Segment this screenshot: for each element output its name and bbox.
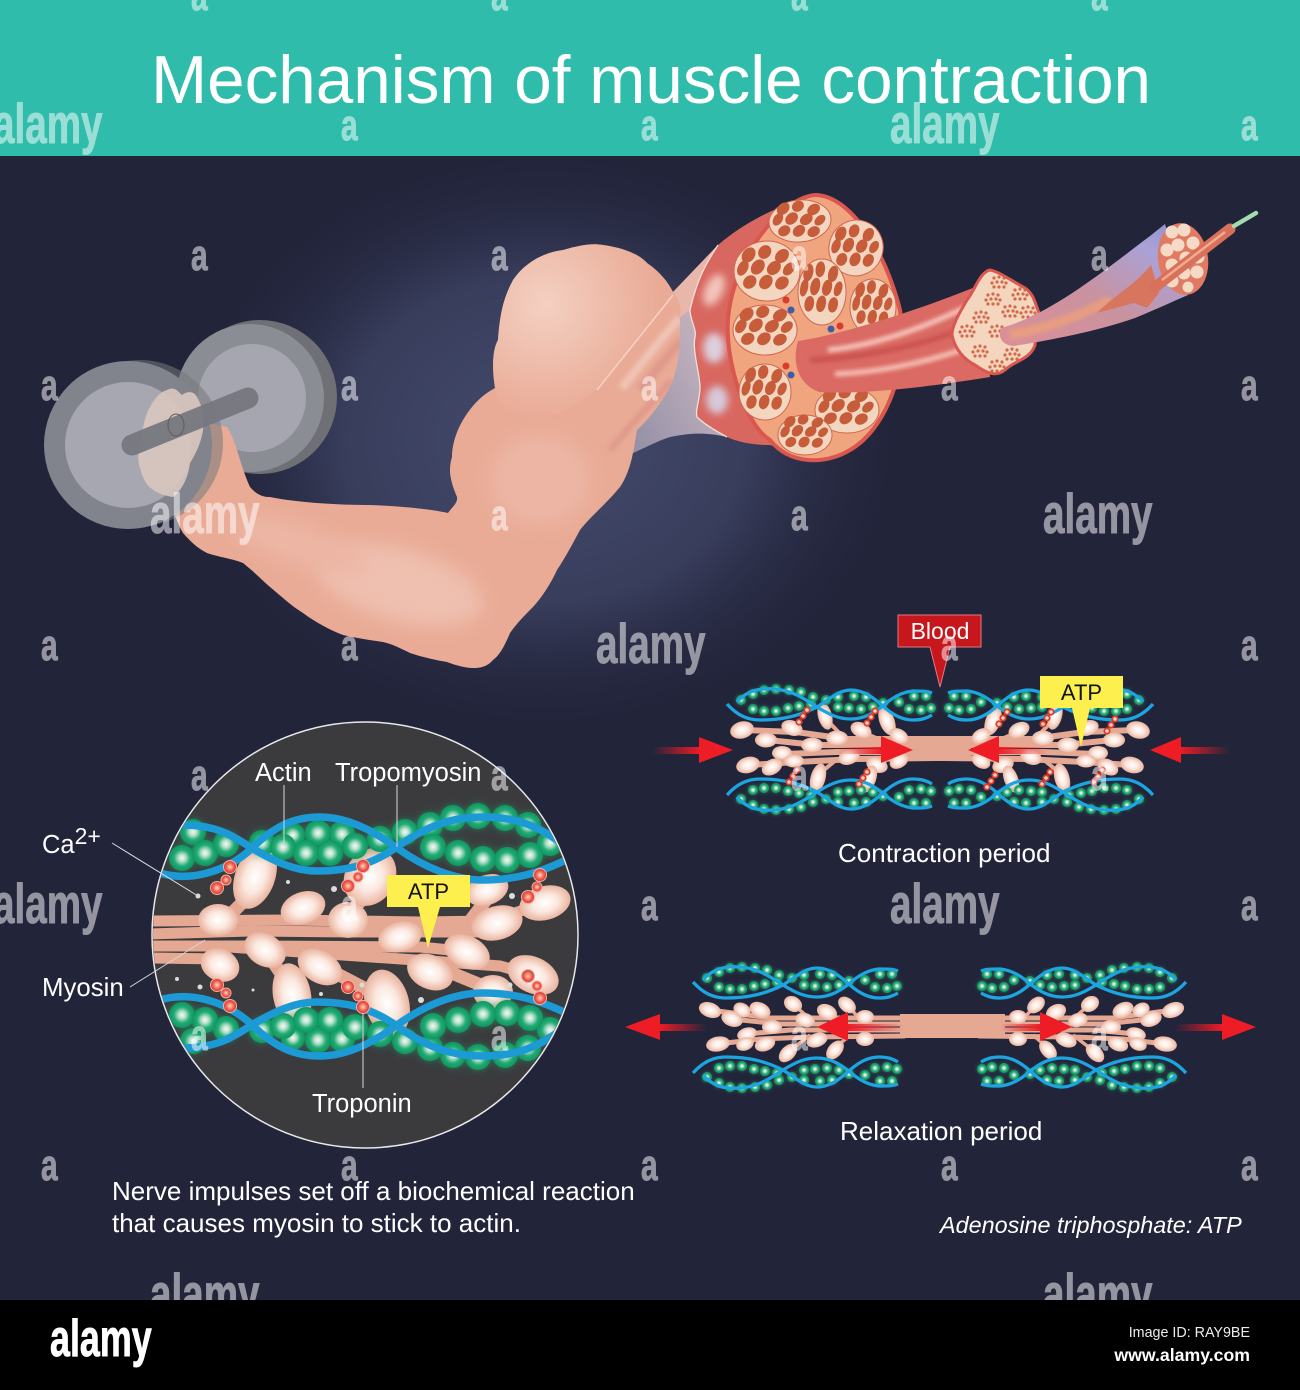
description text: [112, 1176, 635, 1238]
diagram: relaxation period: [625, 962, 1256, 1146]
watermark pattern: a: [1241, 880, 1258, 929]
watermark pattern: a: [1091, 750, 1108, 799]
watermark pattern: a: [791, 1010, 808, 1059]
watermark pattern: a: [641, 1140, 658, 1189]
arrow inner left: [838, 736, 913, 763]
watermark pattern: a: [191, 1010, 208, 1059]
watermark pattern: a: [1241, 360, 1258, 409]
footer logo: alamy: [50, 1311, 152, 1368]
watermark pattern: a: [491, 1010, 508, 1059]
watermark pattern: a: [191, 750, 208, 799]
arrow outer right: [1175, 1014, 1256, 1040]
arrow inner right: [968, 736, 1048, 763]
watermark pattern: a: [491, 750, 508, 799]
diagram: contraction period: [652, 615, 1230, 868]
watermark pattern: a: [41, 620, 58, 669]
panel: magnified sarcomere circle: [150, 722, 578, 1148]
watermark pattern: a: [41, 360, 58, 409]
large watermarks: alamy: [150, 483, 260, 546]
label relaxation period: Relaxation period: [840, 1116, 1042, 1146]
arm body: [165, 244, 682, 668]
watermark pattern: a: [1241, 100, 1258, 149]
label Myosin: Myosin: [42, 974, 124, 1002]
arrow outer left: [652, 737, 733, 763]
watermark pattern: a: [41, 1140, 58, 1189]
watermark pattern: a: [641, 100, 658, 149]
large watermarks: alamy: [1043, 483, 1153, 546]
watermark pattern: a: [1241, 1140, 1258, 1189]
arrow outer left: [625, 1014, 707, 1040]
description text: that causes myosin to stick to actin.: [112, 1208, 521, 1238]
watermark pattern: a: [941, 1140, 958, 1189]
arrow outer right: [1150, 737, 1230, 763]
calcium particles: [175, 880, 515, 1003]
myosin left: [697, 993, 905, 1066]
actin bottom filament: [160, 970, 570, 1070]
label Troponin: Troponin: [312, 1090, 412, 1118]
myosin right: [978, 993, 1186, 1066]
watermark pattern: a: [641, 880, 658, 929]
callout Blood: [898, 615, 981, 687]
arrow inner left: [817, 1012, 903, 1041]
wrapped fiber: [1000, 224, 1188, 346]
callout ATP: ATP: [408, 879, 449, 904]
header band: [0, 0, 1300, 156]
thin filaments: [693, 962, 1186, 1093]
watermark pattern: a: [641, 360, 658, 409]
bundle cross section: [952, 270, 1040, 374]
label Myosin: [42, 940, 205, 1002]
watermark pattern: a: [341, 620, 358, 669]
watermark pattern: a: [1241, 620, 1258, 669]
watermark pattern: a: [341, 1140, 358, 1189]
watermark pattern: a: [791, 490, 808, 539]
callout ATP: [1040, 676, 1123, 747]
watermark pattern: a: [341, 360, 358, 409]
actin top filament: [160, 803, 570, 904]
label Tropomyosin: Tropomyosin: [335, 759, 481, 787]
watermark pattern: a: [941, 620, 958, 669]
watermark pattern: a: [791, 750, 808, 799]
footer url: www.alamy.com: [1113, 1345, 1250, 1365]
large watermarks: alamy: [1043, 1263, 1153, 1326]
large watermarks: alamy: [890, 873, 1000, 936]
myosin band: [900, 1014, 1005, 1038]
watermark pattern: a: [1091, 230, 1108, 279]
ATP definition note: Adenosine triphosphate: ATP: [938, 1212, 1242, 1238]
label Troponin: [312, 1013, 412, 1118]
dumbbell far plate: [176, 320, 337, 474]
illustration: arm lifting dumbbell: [44, 195, 1256, 668]
callout ATP: [387, 875, 470, 948]
large cross section: [728, 195, 902, 460]
label Ca2+: [42, 823, 198, 896]
footer image id: Image ID: RAY9BE: [1129, 1325, 1250, 1341]
arm sheath: [620, 245, 727, 453]
troponin clusters: [786, 707, 1118, 790]
description text: Nerve impulses set off a biochemical reaction: [112, 1176, 635, 1206]
callout Blood: Blood: [911, 618, 969, 644]
watermark pattern: a: [491, 230, 508, 279]
muscle bundle: [796, 283, 990, 393]
fiber cross section: [1153, 220, 1213, 298]
watermark pattern: a: [341, 880, 358, 929]
callout ATP: ATP: [1061, 680, 1102, 705]
watermark pattern: a: [941, 360, 958, 409]
large watermarks: alamy: [596, 613, 706, 676]
thin filaments: [727, 684, 1153, 815]
label Ca2+: 2+: [75, 823, 101, 849]
myosin band: [905, 736, 971, 761]
label Ca2+: Ca: [42, 831, 75, 859]
label Actin: [255, 759, 312, 843]
myosin right: [944, 701, 1152, 795]
watermark pattern: a: [791, 230, 808, 279]
myosin filament: [150, 839, 575, 1042]
footer bar: [0, 1300, 1300, 1390]
arrow inner right: [1000, 1012, 1072, 1041]
dumbbell near plate and hand: [44, 360, 248, 529]
myofibril: [1155, 213, 1256, 287]
muscle body: [690, 203, 795, 450]
large watermarks: alamy: [890, 93, 1000, 156]
label Actin: Actin: [255, 759, 312, 787]
watermark pattern: a: [191, 230, 208, 279]
myosin left: [728, 701, 936, 795]
large watermarks: alamy: [150, 1263, 260, 1326]
watermark pattern: a: [491, 490, 508, 539]
watermark pattern: a: [1091, 1010, 1108, 1059]
title: Mechanism of muscle contraction: [151, 43, 1151, 118]
large watermarks: [0, 93, 1153, 1326]
label contraction period: Contraction period: [838, 838, 1050, 868]
watermark pattern: a: [341, 100, 358, 149]
